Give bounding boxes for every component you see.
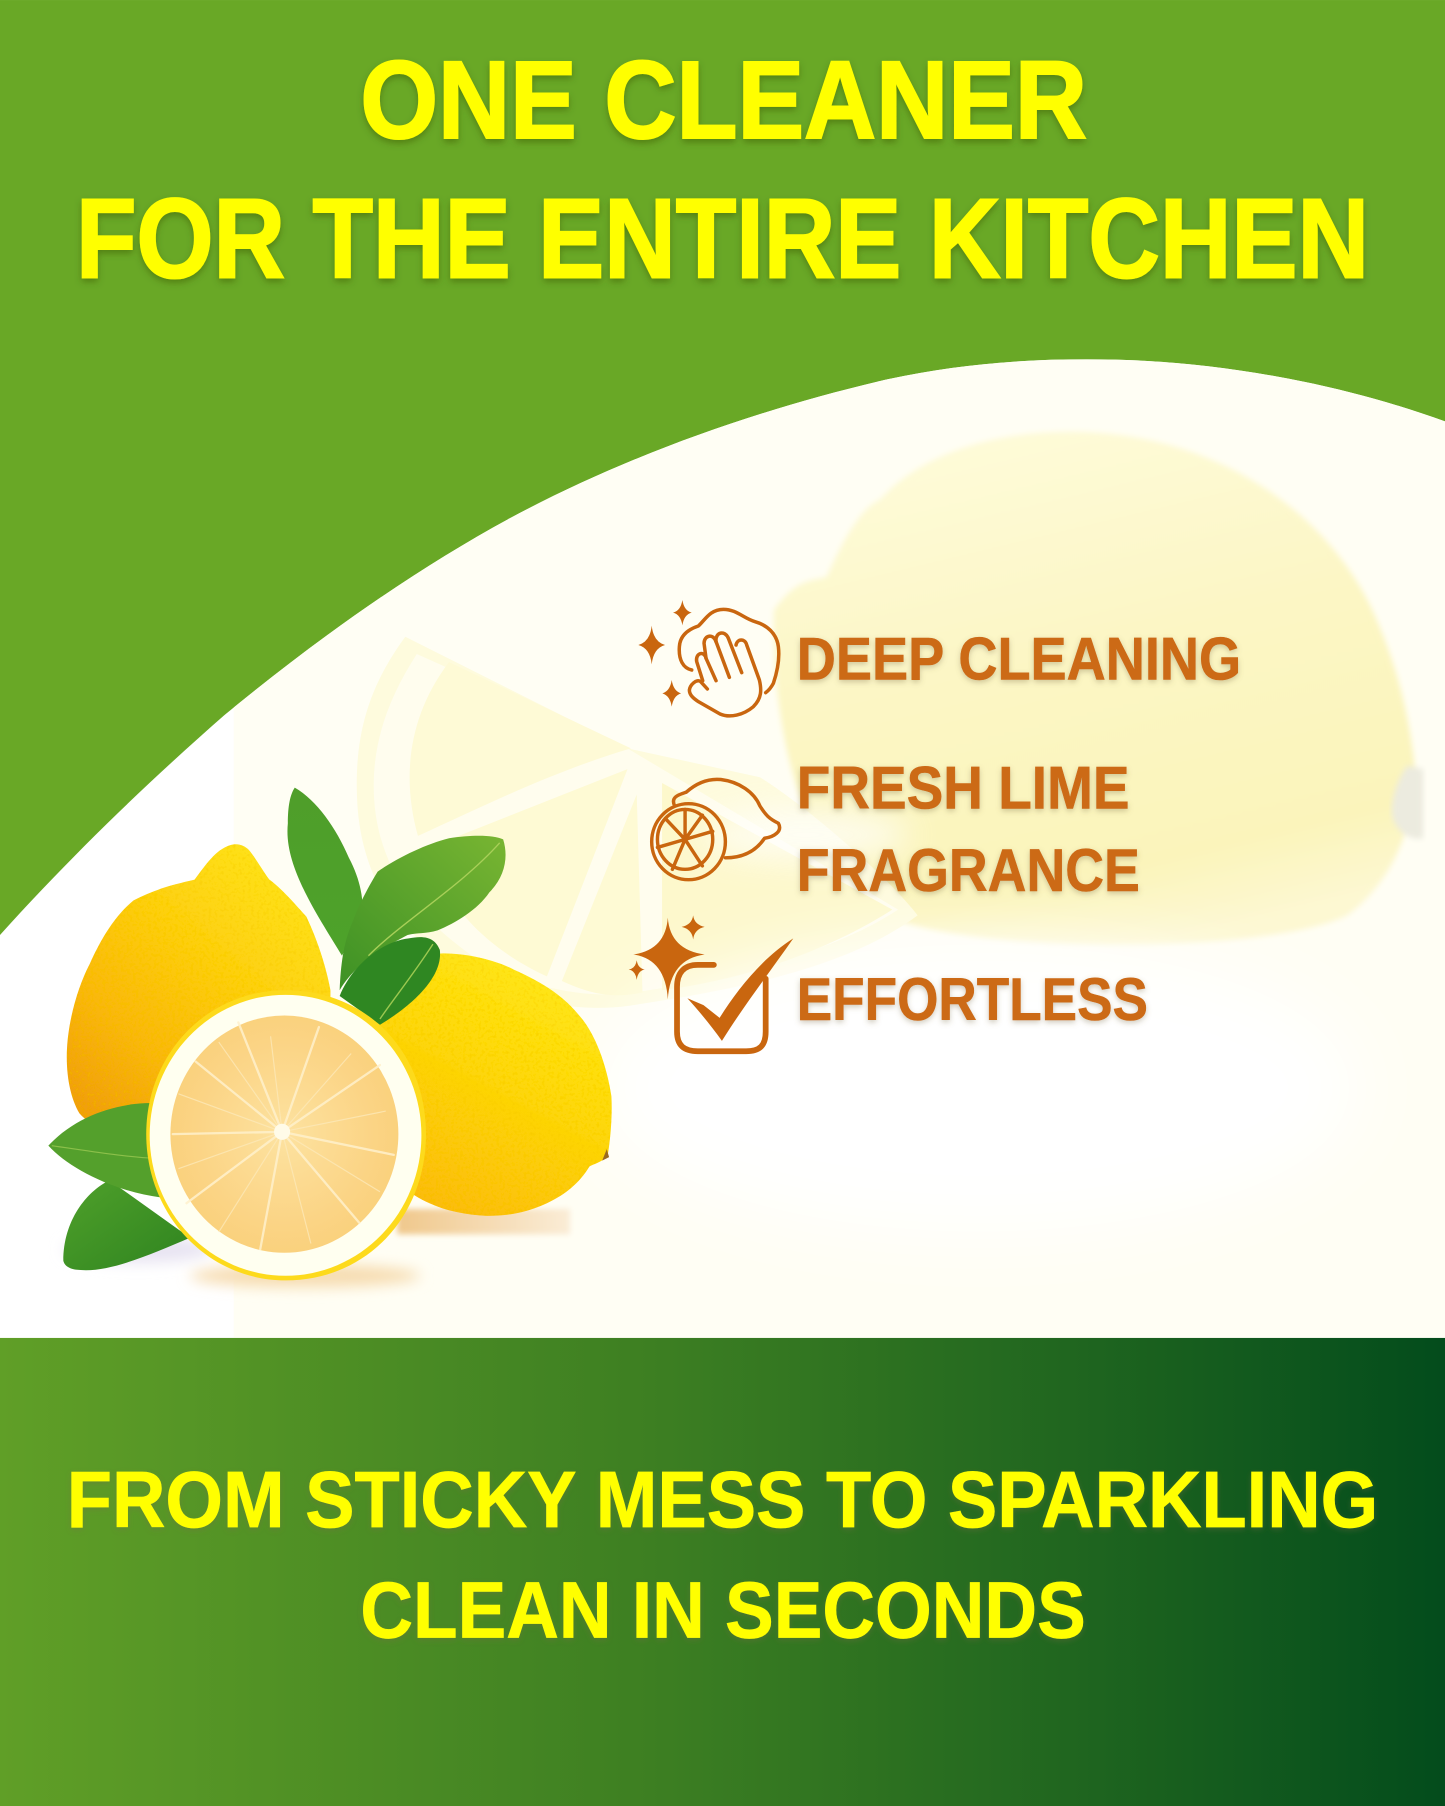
- panel: white curved area with faded photo: [0, 345, 1445, 1382]
- lemon group photo: [48, 788, 612, 1287]
- footer band: [0, 1338, 1445, 1806]
- foam: [599, 944, 1359, 1232]
- feature: deep cleaning: [638, 600, 1241, 716]
- icon: hand wiping: [638, 600, 779, 716]
- faded large lemon: [774, 432, 1414, 945]
- footer text: FROM STICKY MESS TO SPARKLING: [67, 1455, 1378, 1544]
- footer text: CLEAN IN SECONDS: [360, 1565, 1086, 1654]
- title: ONE CLEANER: [360, 39, 1087, 162]
- footer text: [67, 1455, 1378, 1654]
- icon: checkbox with sparkles: [629, 915, 793, 1051]
- feature: effortless: [629, 915, 1148, 1051]
- leaf: lower right: [340, 937, 440, 1025]
- feature: fresh lime fragrance: [652, 754, 1140, 904]
- icon: cut lemon: [652, 779, 780, 880]
- green header background: [0, 0, 1445, 1339]
- label: DEEP CLEANING: [797, 625, 1241, 692]
- cut lemon: [146, 990, 426, 1280]
- leaf: bottom left: [63, 1180, 190, 1270]
- faded lemon slice: [357, 637, 918, 1008]
- label: FRESH LIME: [797, 754, 1130, 821]
- ground shadows: [63, 1209, 570, 1287]
- flesh segment lines: [173, 1022, 394, 1249]
- label: EFFORTLESS: [797, 966, 1148, 1033]
- faded lemon tip: [1392, 766, 1423, 839]
- title: [76, 39, 1369, 302]
- label: FRAGRANCE: [797, 837, 1140, 904]
- leaf: right: [340, 836, 506, 990]
- lemon: left: [67, 844, 330, 1140]
- leaf: left: [48, 1103, 161, 1197]
- lemon: right: [368, 953, 612, 1216]
- leaf: top: [287, 788, 363, 956]
- lemon: tip: [602, 1149, 609, 1161]
